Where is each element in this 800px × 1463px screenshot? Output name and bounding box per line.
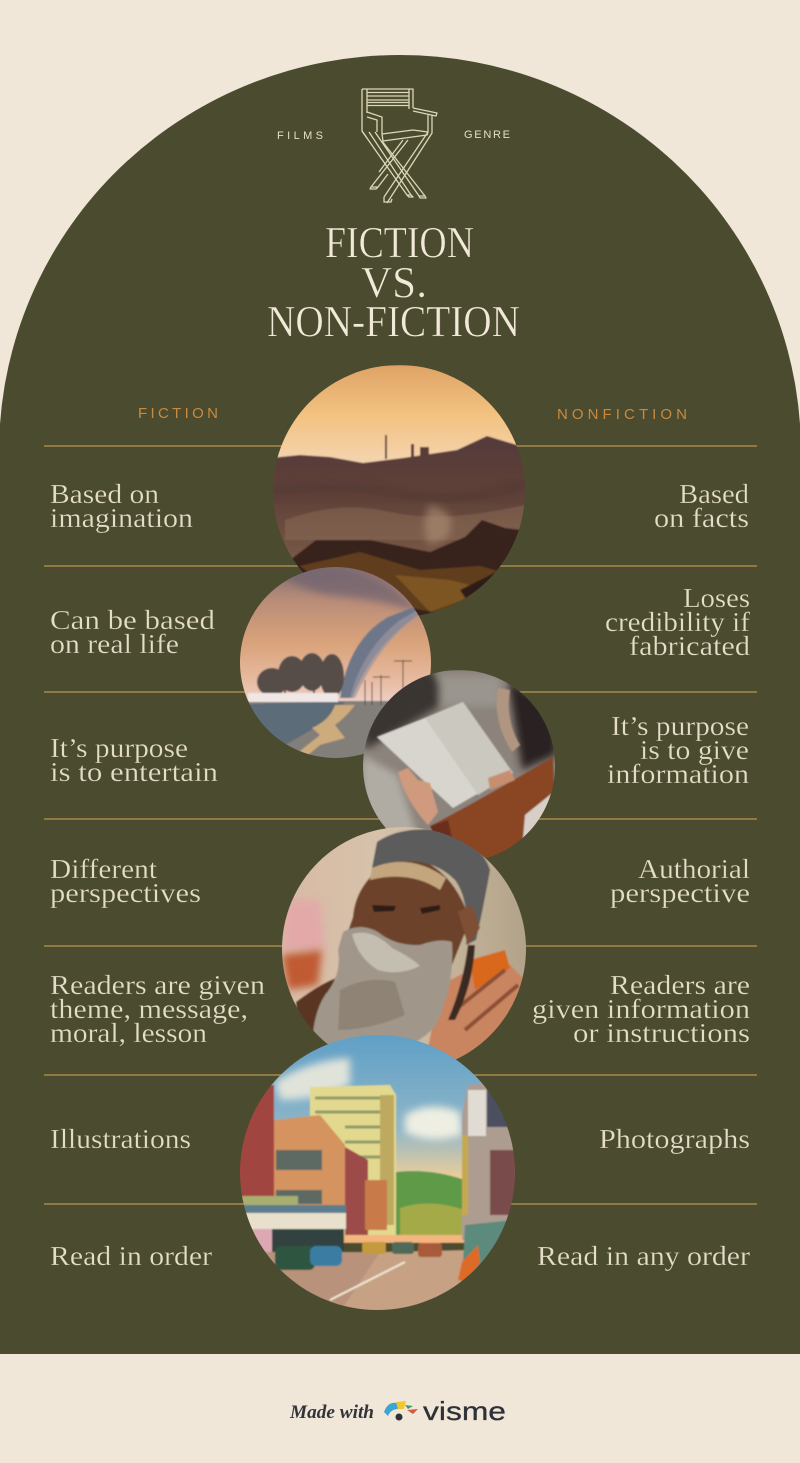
row 2 nonfiction: Loses: [683, 583, 750, 613]
row 2 fiction: on real life: [50, 629, 179, 659]
visme wordmark: visme: [423, 1396, 506, 1426]
row 2 fiction: Can be based: [50, 605, 216, 635]
row 5 nonfiction: [532, 970, 751, 1048]
row 3 nonfiction: [607, 711, 750, 789]
photo circle: vintage street postcard: [238, 1033, 521, 1313]
icon: director's chair: [362, 89, 437, 203]
row 4 fiction: perspectives: [50, 878, 201, 908]
made with script: Made with: [289, 1402, 374, 1423]
photo circle: volcanic hillside at sunset: [270, 365, 530, 620]
row 3 fiction: is to entertain: [50, 757, 219, 787]
label: films: FILMS: [277, 130, 323, 142]
fiction column text: [50, 479, 266, 1271]
photo circle: bearded elder portrait: [280, 825, 530, 1075]
row 4 fiction: Different: [50, 854, 158, 884]
title: FICTION: [325, 218, 474, 267]
row 7 nonfiction: Read in any order: [537, 1241, 750, 1271]
title: [267, 218, 520, 346]
row 5 fiction: moral, lesson: [50, 1018, 208, 1048]
row 2 nonfiction: fabricated: [629, 631, 751, 661]
column heading: nonfiction: NONFICTION: [557, 406, 687, 423]
row 1 nonfiction: on facts: [654, 503, 749, 533]
row 1 fiction: [50, 479, 194, 533]
row 6 fiction: Illustrations: [50, 1124, 191, 1154]
icon: visme logo: [384, 1401, 418, 1420]
row 3 fiction: It’s purpose: [50, 733, 188, 763]
row 4 nonfiction: Authorial: [638, 854, 750, 884]
row 3 nonfiction: information: [607, 759, 750, 789]
title: VS.: [361, 258, 427, 307]
row 5 nonfiction: or instructions: [573, 1018, 750, 1048]
row 3 fiction: [50, 733, 219, 787]
row 1 nonfiction: [654, 479, 750, 533]
label: genre: GENRE: [464, 129, 510, 141]
nonfiction column text: [532, 479, 751, 1271]
row 2 nonfiction: [605, 583, 751, 661]
row 5 fiction: theme, message,: [50, 994, 248, 1024]
row 7 fiction: Read in order: [50, 1241, 212, 1271]
row 3 nonfiction: is to give: [640, 735, 749, 765]
row 5 fiction: [50, 970, 266, 1048]
row 6 nonfiction: Photographs: [599, 1124, 750, 1154]
row 4 nonfiction: perspective: [610, 878, 750, 908]
photo circle: tornado over road: [238, 565, 434, 761]
row 2 nonfiction: credibility if: [605, 607, 750, 637]
row 3 nonfiction: It’s purpose: [611, 711, 749, 741]
row 5 nonfiction: Readers are: [610, 970, 750, 1000]
photo circle: person reading a book: [363, 670, 555, 858]
row 4 fiction: [50, 854, 201, 908]
row 1 fiction: imagination: [50, 503, 194, 533]
row 1 fiction: Based on: [50, 479, 160, 509]
row 5 fiction: Readers are given: [50, 970, 266, 1000]
row 5 nonfiction: given information: [532, 994, 751, 1024]
column heading: fiction: FICTION: [138, 405, 218, 422]
title: NON-FICTION: [267, 297, 520, 346]
row 4 nonfiction: [610, 854, 750, 908]
row 2 fiction: [50, 605, 216, 659]
row 1 nonfiction: Based: [679, 479, 750, 509]
footer credit: made with visme: [289, 1396, 506, 1426]
